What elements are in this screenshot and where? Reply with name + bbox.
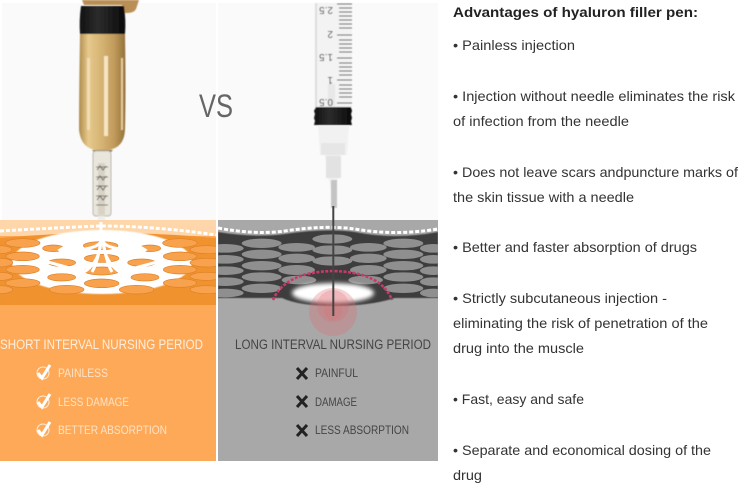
panel: long interval (gray) <box>206 206 447 461</box>
red dashed arc <box>273 271 392 300</box>
text block: advantages: drug into the muscle <box>453 340 584 356</box>
text block: advantages: drug <box>453 467 482 483</box>
red pain circle <box>309 288 357 336</box>
white dotted skin line <box>218 227 438 232</box>
list: benefits: LESS DAMAGE <box>58 397 129 409</box>
panel: syringe background <box>218 3 438 220</box>
heading: long interval: LONG INTERVAL NURSING PERIOD <box>235 337 431 352</box>
list: drawbacks: DAMAGE <box>315 397 357 409</box>
text block: advantages: • Strictly subcutaneous injection - <box>453 290 667 306</box>
list: benefits <box>37 365 167 437</box>
text block: advantages: • Painless injection <box>453 37 575 53</box>
list: drawbacks: PAINFUL <box>315 368 359 380</box>
text block: advantages: eliminating the risk of penetration of the <box>453 315 708 331</box>
text block: advantages <box>453 4 738 483</box>
text block: advantages: of infection from the needle <box>453 113 629 129</box>
text block: advantages: • Does not leave scars andpuncture marks of <box>453 164 738 180</box>
white dotted skin line <box>0 226 216 235</box>
list: drawbacks <box>297 368 409 437</box>
dark skin band <box>218 230 438 306</box>
text block: advantages: • Fast, easy and safe <box>453 391 584 407</box>
white arrows of fluid <box>39 222 166 272</box>
panel: pen background <box>2 3 216 220</box>
text block: advantages: • Separate and economical dosing of the <box>453 442 711 458</box>
heading: VS: VS <box>199 88 233 124</box>
text block: advantages: the skin tissue with a needle <box>453 189 634 205</box>
fat cells <box>0 239 223 294</box>
icon: syringe with needle <box>314 3 352 208</box>
icon: syringe with needle: 1 <box>327 74 333 85</box>
icon: syringe with needle: 1.5 <box>319 51 333 62</box>
dark skin band <box>0 233 216 305</box>
list: benefits: PAINLESS <box>58 368 108 380</box>
list: drawbacks: LESS ABSORPTION <box>315 425 409 437</box>
heading: short interval: SHORT INTERVAL NURSING PERIOD <box>0 337 203 352</box>
text block: advantages: • Injection without needle eliminates the risk <box>453 88 736 104</box>
white injury pocket <box>292 283 374 303</box>
fat cells <box>206 234 447 297</box>
list: benefits: BETTER ABSORPTION <box>58 425 167 437</box>
panel: short interval (orange) <box>0 220 223 461</box>
icon: gold hyaluron pen <box>79 0 139 222</box>
white fluid spread <box>12 230 192 294</box>
text block: advantages: Advantages of hyaluron filler pen: <box>453 4 698 20</box>
needle <box>332 206 334 316</box>
text block: advantages: • Better and faster absorption of drugs <box>453 239 697 255</box>
icon: syringe with needle: 2 <box>327 28 333 39</box>
icon: syringe with needle: 2.5 <box>319 4 333 15</box>
icon: syringe with needle: 0.5 <box>319 96 333 107</box>
